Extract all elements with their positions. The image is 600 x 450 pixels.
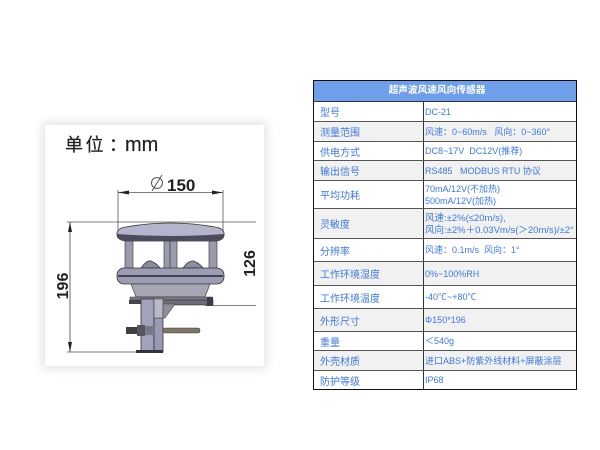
row: humidity: 工作环境湿度 — [320, 270, 380, 281]
row: power consumption: 平均功耗 — [320, 191, 360, 202]
sensor body — [117, 223, 224, 353]
row: range: 测量范围 — [320, 128, 360, 139]
row: range: 风速：0~60m/s 风向：0~360° — [425, 127, 550, 137]
specification table — [313, 80, 577, 390]
row: model: 型号 — [320, 108, 340, 119]
row: resolution: 分辨率 — [320, 246, 350, 258]
row: sensitivity — [314, 209, 576, 239]
row: power consumption: 70mA/12V(不加热) — [425, 184, 500, 194]
mounting bolt — [126, 325, 200, 336]
row: weight — [314, 332, 576, 351]
row: resolution — [314, 239, 576, 262]
row: resolution: 风速：0.1m/s 风向：1° — [425, 245, 520, 255]
row: temperature: 工作环境温度 — [320, 294, 380, 304]
row: weight: ＜540g — [425, 336, 454, 346]
unit label: ： — [109, 135, 127, 155]
row: material: 外壳材质 — [320, 357, 360, 368]
row: weight: 重量 — [320, 338, 340, 348]
row: sensitivity: 风速:±2%(≤20m/s), — [425, 213, 506, 224]
row: range — [314, 122, 576, 142]
diameter dimension — [118, 175, 223, 232]
panel: dimension drawing card — [45, 125, 264, 366]
row: output: RS485 MODBUS RTU 协议 — [425, 166, 541, 176]
row: humidity: 0%~100%RH — [425, 269, 479, 279]
row: sensitivity: 灵敏度 — [320, 220, 350, 231]
diameter dimension: 150 — [167, 176, 195, 195]
row: dimensions: 外形尺寸 — [320, 316, 360, 328]
row: protection: IP68 — [425, 375, 444, 385]
height dimension 126 — [205, 250, 259, 306]
row: temperature — [314, 286, 576, 309]
height dimension 196: 196 — [55, 273, 72, 299]
table header: 超声波风速风向传感器 — [389, 85, 485, 96]
row: material — [314, 351, 576, 371]
row: power consumption — [314, 181, 576, 209]
row: power — [314, 142, 576, 161]
row: power: 供电方式 — [320, 148, 360, 158]
row: protection: 防护等级 — [320, 376, 360, 388]
row: model: DC-21 — [425, 107, 451, 117]
row: model — [314, 102, 576, 122]
row: dimensions: Φ150*196 — [425, 315, 466, 325]
table header — [314, 81, 576, 102]
unit label: mm — [125, 134, 158, 156]
row: sensitivity: 风向:±2%＋0.03Vm/s(＞20m/s)/±2° — [425, 224, 574, 236]
sensor dimension drawing — [55, 134, 259, 353]
row: power: DC8~17V DC12V(推荐) — [425, 146, 522, 156]
height dimension 196 — [55, 222, 256, 352]
height dimension 126: 126 — [242, 250, 259, 277]
row: output: 输出信号 — [320, 167, 360, 178]
row: temperature: -40℃~+80℃ — [425, 292, 477, 302]
row: power consumption: 500mA/12V(加热) — [425, 196, 496, 206]
row: material: 进口ABS+防紫外线材料+屏蔽涂层 — [425, 356, 562, 366]
row: output — [314, 161, 576, 181]
row: dimensions — [314, 309, 576, 332]
row: protection — [320, 371, 444, 389]
unit label: 单位 — [65, 135, 106, 155]
row: humidity — [314, 262, 576, 286]
